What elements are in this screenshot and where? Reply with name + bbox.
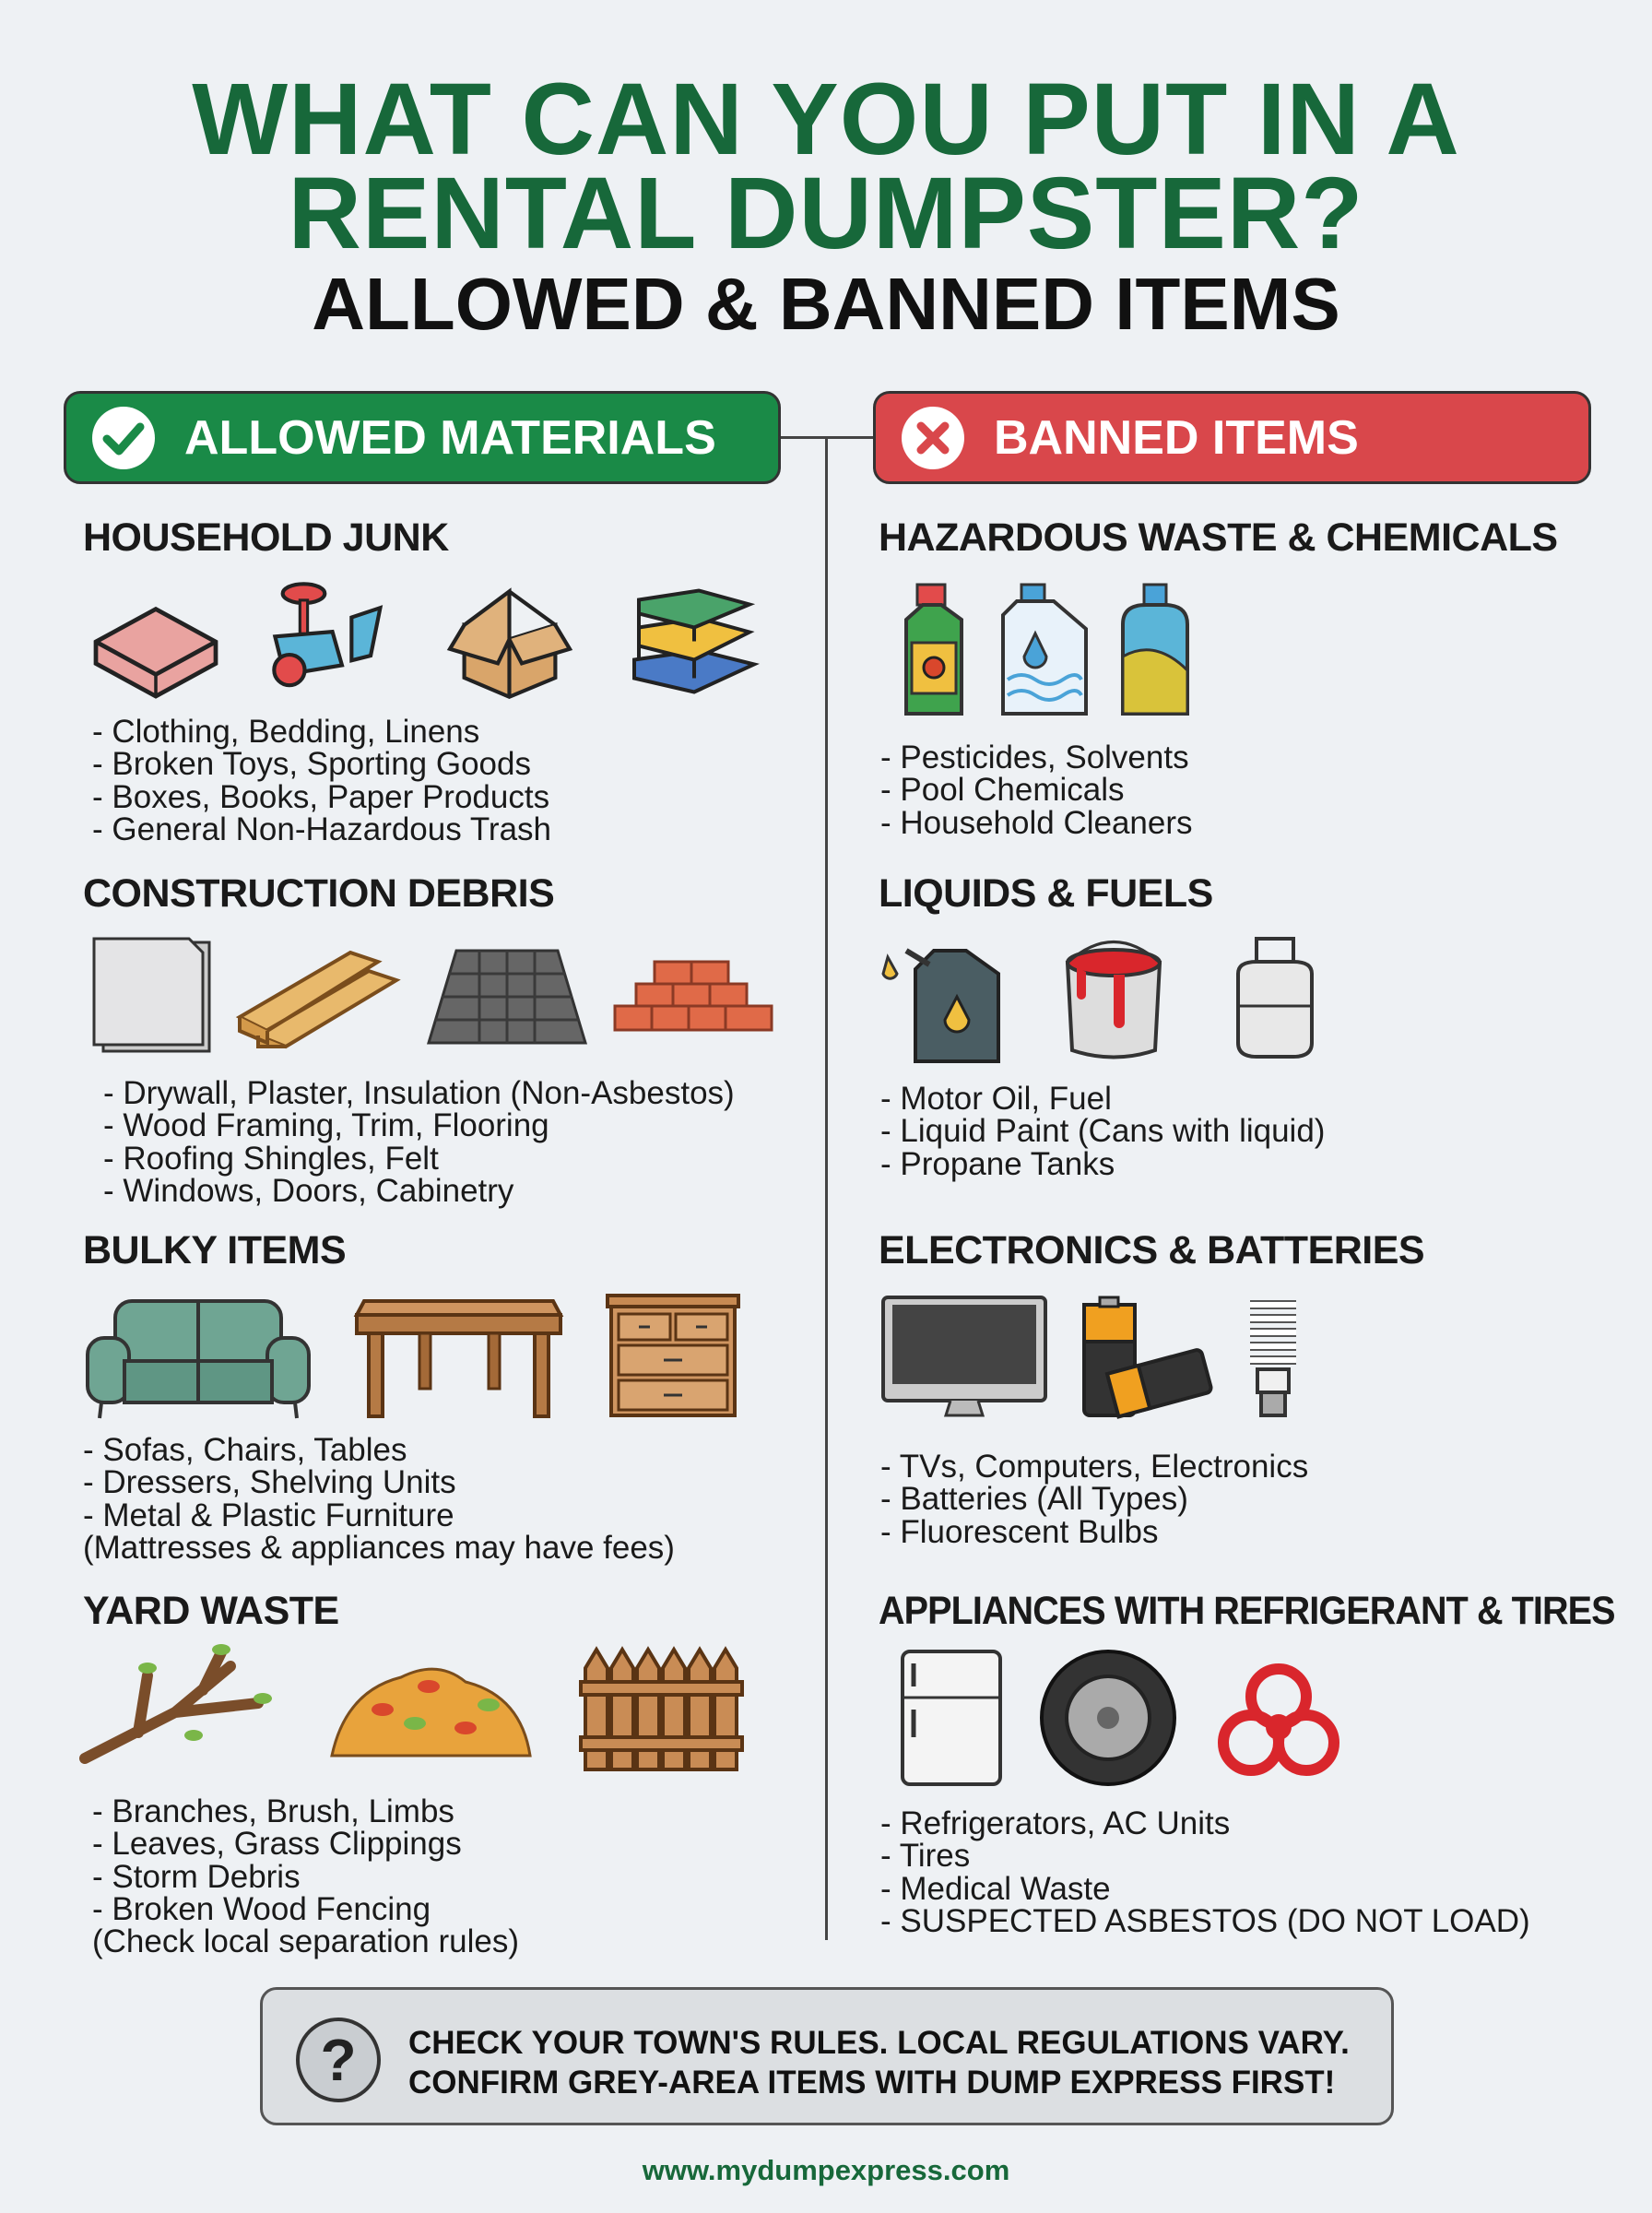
- icons: liquids: [881, 937, 1314, 1063]
- list: liquids: - Motor Oil, Fuel: [880, 1081, 1112, 1117]
- list: bulky: - Metal & Plastic Furniture: [83, 1497, 454, 1533]
- header: banned items: BANNED ITEMS: [994, 411, 1359, 465]
- list: electronics: - Fluorescent Bulbs: [880, 1514, 1159, 1550]
- list: bulky: - Sofas, Chairs, Tables: [83, 1432, 407, 1468]
- icon: question: ?: [320, 2027, 357, 2093]
- list: hazardous: - Household Cleaners: [880, 805, 1193, 841]
- header: allowed materials: ALLOWED MATERIALS: [184, 411, 716, 465]
- callout text: CHECK YOUR TOWN'S RULES. LOCAL REGULATIONS VARY.: [408, 2025, 1350, 2061]
- title: ALLOWED & BANNED ITEMS: [312, 263, 1340, 345]
- header: allowed materials: [64, 391, 781, 484]
- list: yard: - Storm Debris: [92, 1859, 301, 1895]
- heading: yard: YARD WASTE: [83, 1589, 339, 1633]
- title: [192, 63, 1460, 345]
- heading: liquids: LIQUIDS & FUELS: [879, 871, 1213, 916]
- icon: x: [902, 407, 964, 469]
- list: yard: - Branches, Brush, Limbs: [92, 1793, 454, 1829]
- title: WHAT CAN YOU PUT IN A: [192, 63, 1460, 176]
- list: construction: - Wood Framing, Trim, Flooring: [103, 1107, 549, 1143]
- list: liquids: - Liquid Paint (Cans with liquid): [880, 1113, 1325, 1149]
- list: hazardous: - Pesticides, Solvents: [880, 740, 1189, 775]
- icons: construction: [92, 937, 773, 1053]
- list: bulky: [83, 1432, 675, 1566]
- list: household: - Clothing, Bedding, Linens: [92, 714, 479, 750]
- list: appliances: [880, 1805, 1530, 1939]
- list: electronics: - TVs, Computers, Electronics: [880, 1449, 1308, 1485]
- icons: bulky: [86, 1294, 740, 1418]
- heading: appliances: APPLIANCES WITH REFRIGERANT & TIRES: [879, 1589, 1615, 1633]
- header: banned items: [873, 391, 1591, 484]
- icon: check: [92, 407, 155, 469]
- list: household: - General Non-Hazardous Trash: [92, 811, 551, 847]
- panel: liquids & fuels: [879, 871, 1325, 1182]
- icons: hazardous: [904, 583, 1189, 716]
- heading: household junk: HOUSEHOLD JUNK: [83, 515, 449, 560]
- list: construction: - Windows, Doors, Cabinetry: [103, 1173, 513, 1209]
- callout text: CONFIRM GREY-AREA ITEMS WITH DUMP EXPRESS FIRST!: [408, 2065, 1335, 2101]
- list: construction: [103, 1075, 735, 1209]
- list: yard: (Check local separation rules): [92, 1923, 519, 1959]
- icons: appliances: [901, 1650, 1339, 1786]
- panel: appliances & tires: [879, 1589, 1615, 1939]
- divider line: [780, 436, 873, 439]
- callout: check rules: [260, 1987, 1394, 2125]
- list: bulky: (Mattresses & appliances may have fees): [83, 1530, 675, 1566]
- list: construction: - Roofing Shingles, Felt: [103, 1141, 439, 1177]
- panel: hazardous waste: [879, 515, 1558, 841]
- list: liquids: - Propane Tanks: [880, 1146, 1115, 1182]
- title: RENTAL DUMPSTER?: [289, 157, 1363, 270]
- list: yard: - Broken Wood Fencing: [92, 1891, 431, 1927]
- list: electronics: [880, 1449, 1308, 1550]
- heading: bulky: BULKY ITEMS: [83, 1228, 346, 1272]
- list: yard: [92, 1793, 519, 1959]
- heading: hazardous: HAZARDOUS WASTE & CHEMICALS: [879, 515, 1558, 560]
- list: household: [92, 714, 551, 847]
- list: hazardous: - Pool Chemicals: [880, 772, 1125, 808]
- list: appliances: - Refrigerators, AC Units: [880, 1805, 1230, 1841]
- icons: yard: [79, 1644, 744, 1771]
- icons: household: [94, 582, 760, 699]
- list: construction: - Drywall, Plaster, Insulation (Non-Asbestos): [103, 1075, 735, 1111]
- list: yard: - Leaves, Grass Clippings: [92, 1826, 462, 1862]
- list: household: - Broken Toys, Sporting Goods: [92, 746, 531, 782]
- icons: electronics: [881, 1296, 1296, 1419]
- list: appliances: - Medical Waste: [880, 1871, 1111, 1907]
- panel: electronics & batteries: [879, 1228, 1424, 1550]
- footer url: www.mydumpexpress.com: [643, 2154, 1009, 2186]
- list: liquids: [880, 1081, 1325, 1182]
- list: appliances: - Tires: [880, 1838, 970, 1874]
- callout text: [408, 2025, 1350, 2101]
- list: bulky: - Dressers, Shelving Units: [83, 1464, 456, 1500]
- heading: electronics: ELECTRONICS & BATTERIES: [879, 1228, 1424, 1272]
- list: appliances: - SUSPECTED ASBESTOS (DO NOT LOAD): [880, 1903, 1530, 1939]
- panel: household junk: [83, 515, 760, 847]
- panel: construction debris: [83, 871, 773, 1209]
- list: electronics: - Batteries (All Types): [880, 1481, 1188, 1517]
- heading: construction: CONSTRUCTION DEBRIS: [83, 871, 554, 916]
- list: household: - Boxes, Books, Paper Products: [92, 779, 549, 815]
- list: hazardous: [880, 740, 1193, 841]
- panel: bulky items: [83, 1228, 740, 1566]
- panel: yard waste: [79, 1589, 744, 1959]
- icon: question: [296, 2018, 381, 2102]
